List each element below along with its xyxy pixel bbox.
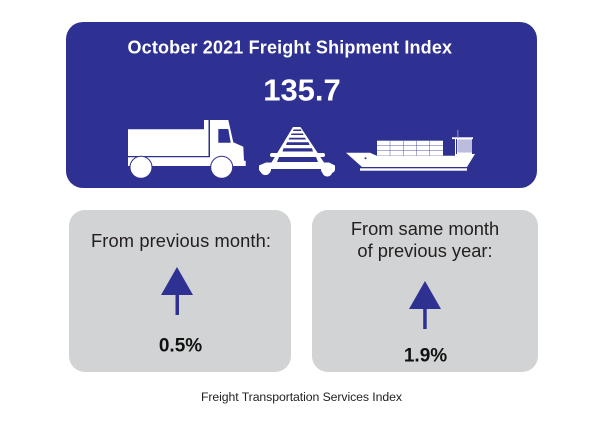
panel: freight shipment index	[66, 22, 537, 188]
icon: railroad track	[259, 127, 335, 176]
icon: truck	[128, 120, 246, 178]
panel: from same month of previous year	[312, 210, 538, 372]
icon: up arrow	[409, 281, 441, 329]
label: from same month of previous year: of previous year:	[357, 240, 493, 261]
panel: from previous month	[69, 210, 291, 372]
icon: up arrow	[161, 267, 193, 315]
heading: October 2021 Freight Shipment Index: October 2021 Freight Shipment Index	[128, 38, 452, 58]
label: from same month of previous year: From same month	[351, 218, 499, 239]
label: from previous month: From previous month:	[91, 230, 271, 251]
value: 0.5%: 0.5%	[159, 336, 202, 356]
value: 1.9%: 1.9%	[404, 346, 447, 366]
icon: container ship	[346, 130, 475, 171]
index value: 135.7	[263, 73, 341, 108]
caption: source index name: Freight Transportation Services Index	[201, 390, 403, 404]
